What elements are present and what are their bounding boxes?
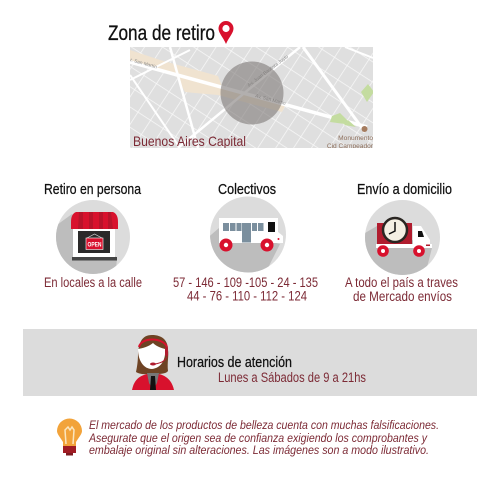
map: major roads [130,47,373,148]
map panel [129,47,374,150]
title: Zona de retiro: Zona de retiro [108,22,215,45]
caption: En locales a la calle [44,275,142,290]
map: shaded area circle [220,62,284,124]
column: Retiro en persona [44,182,142,290]
map: street labels: Av. Juan Bautista Justo [247,54,290,89]
icon: light bulb [57,418,82,456]
icon: call-centre agent [132,335,174,390]
heading: Retiro en persona [44,182,142,198]
heading: Envío a domicilio [357,182,452,198]
icon: shop: OPEN [88,242,102,248]
column: Colectivos [173,182,318,304]
text: hours: Lunes a Sábados de 9 a 21hs [218,370,366,385]
map: monument marker [327,126,373,148]
map: street labels [129,54,290,107]
text block: notice [88,418,439,457]
caption: A todo el país a traves [345,275,458,290]
caption: routes: 44 - 76 - 110 - 112 - 124 [187,288,307,304]
text block: notice: embalaje original sin alteraciones. Las imágenes son a modo ilustrativo. [89,443,429,457]
icon: map pin [218,21,234,44]
map: street labels: Av. San Martín [254,93,287,107]
heading: Colectivos [218,182,276,198]
caption: routes [173,275,318,304]
text block: notice: El mercado de los productos de belleza cuenta con muchas falsificaciones. [89,418,439,432]
icon: bus [210,196,286,272]
map: monument marker: Cid Campeador [327,143,374,150]
map caption: Buenos Aires Capital [133,133,246,149]
icon: truck with clock [365,200,440,275]
column: Envío a domicilio [345,182,458,304]
panel: horarios [23,329,477,396]
caption: routes: 57 - 146 - 109 -105 - 24 - 135 [173,275,318,290]
heading: Horarios de atención [177,354,292,371]
text block: notice: Asegurate que el origen sea de confianza exigiendo los comprobantes y [88,431,428,445]
map: street labels: r. San Martín [129,57,158,71]
map: orange district [130,50,285,112]
map: monument marker: Monumento [338,135,373,142]
caption: de Mercado envíos [353,289,452,304]
caption [345,275,458,304]
map: green parks [330,84,374,127]
